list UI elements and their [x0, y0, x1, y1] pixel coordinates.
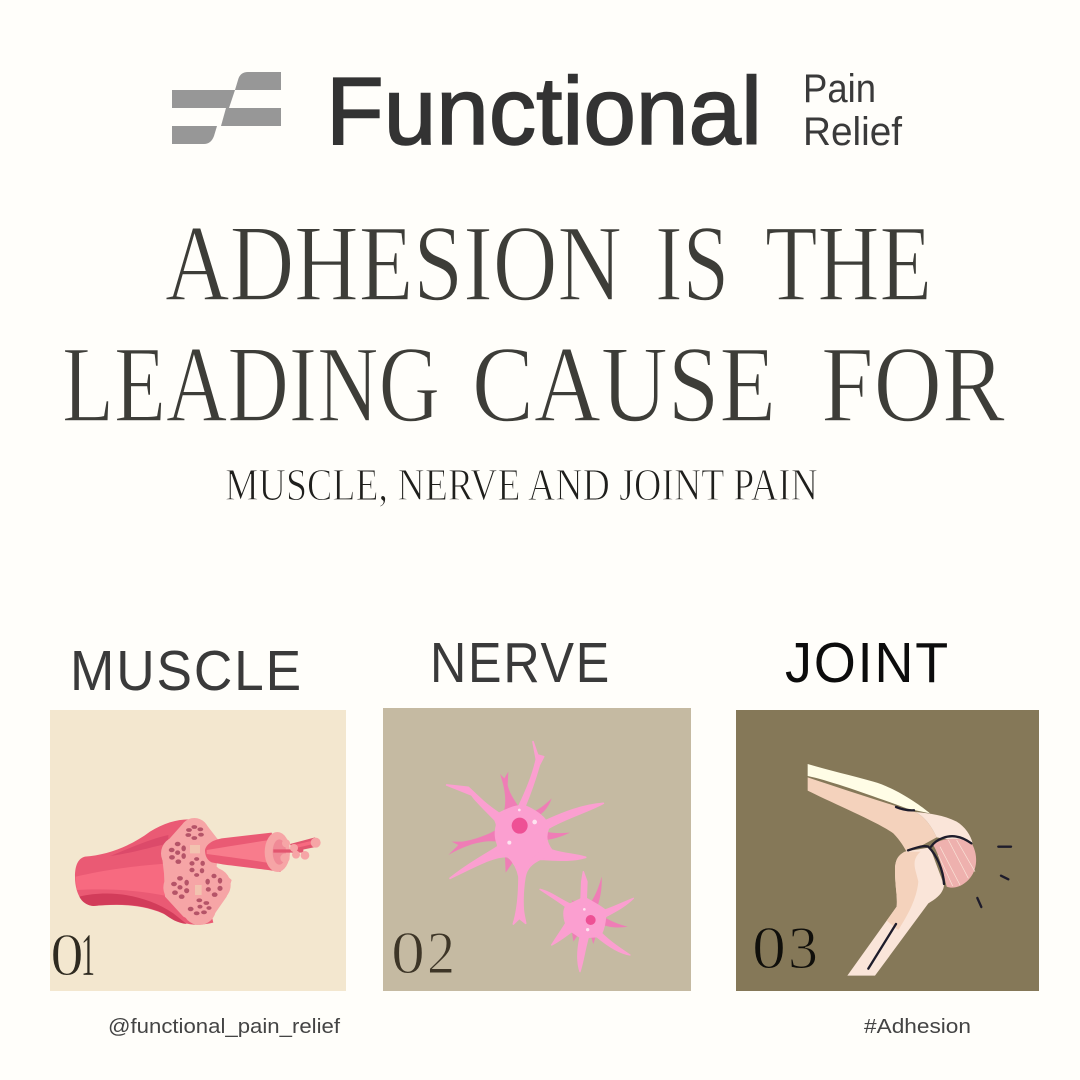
- logo tagline: Relief: [803, 110, 903, 154]
- icon: knee joint: [808, 764, 1011, 976]
- title: FOR: [821, 324, 1005, 445]
- subtitle: MUSCLE, NERVE AND JOINT PAIN: [225, 460, 818, 510]
- footer: hashtag: #Adhesion: [864, 1015, 971, 1038]
- panel: muscle: [50, 710, 346, 991]
- muscle cross-section: [161, 818, 232, 925]
- number 03: 0: [752, 915, 786, 981]
- icon: large nerve cell: [447, 742, 603, 924]
- number 03: 3: [788, 915, 818, 981]
- upper bone: [808, 764, 930, 813]
- title: CAUSE: [472, 324, 776, 445]
- panel: muscle: 1: [81, 922, 95, 988]
- heading: nerve: NERVE: [430, 631, 611, 695]
- icon: logo mark: [172, 72, 281, 144]
- logo tagline: Pain: [803, 67, 876, 111]
- title: ADHESION: [165, 203, 622, 324]
- number 01: [50, 922, 95, 988]
- muscle fibres: [273, 837, 321, 863]
- icon: muscle fibre bundle: [75, 818, 321, 925]
- patella: [933, 839, 976, 888]
- kneecap cap: [915, 812, 973, 843]
- muscle fibre dots: [169, 826, 222, 915]
- pain marks: [977, 847, 1011, 907]
- title: THE: [765, 203, 932, 324]
- number 03: [752, 915, 818, 981]
- smaller muscle bundle: [205, 833, 281, 872]
- title: IS: [655, 203, 729, 324]
- heading: joint: JOINT: [785, 631, 950, 695]
- heading: muscle: MUSCLE: [70, 639, 303, 703]
- joint outlines: [868, 807, 971, 969]
- logo wordmark: Functional: [326, 58, 762, 165]
- upper leg: [808, 777, 937, 853]
- lower leg dark: [887, 852, 921, 930]
- panel: joint: [736, 710, 1039, 991]
- title: LEADING: [62, 324, 440, 445]
- title: [62, 203, 1005, 445]
- number 02: [391, 920, 455, 986]
- footer: handle: @functional_pain_relief: [108, 1015, 340, 1038]
- panel: nerve: [383, 708, 691, 991]
- patella stripes: [938, 840, 975, 886]
- logo: [172, 58, 903, 165]
- number 01: 0: [50, 922, 84, 988]
- lower leg light: [847, 847, 944, 976]
- logo tagline: [803, 67, 903, 154]
- icon: small nerve cell: [540, 872, 633, 972]
- number 02: 2: [427, 920, 455, 986]
- number 02: 0: [391, 920, 425, 986]
